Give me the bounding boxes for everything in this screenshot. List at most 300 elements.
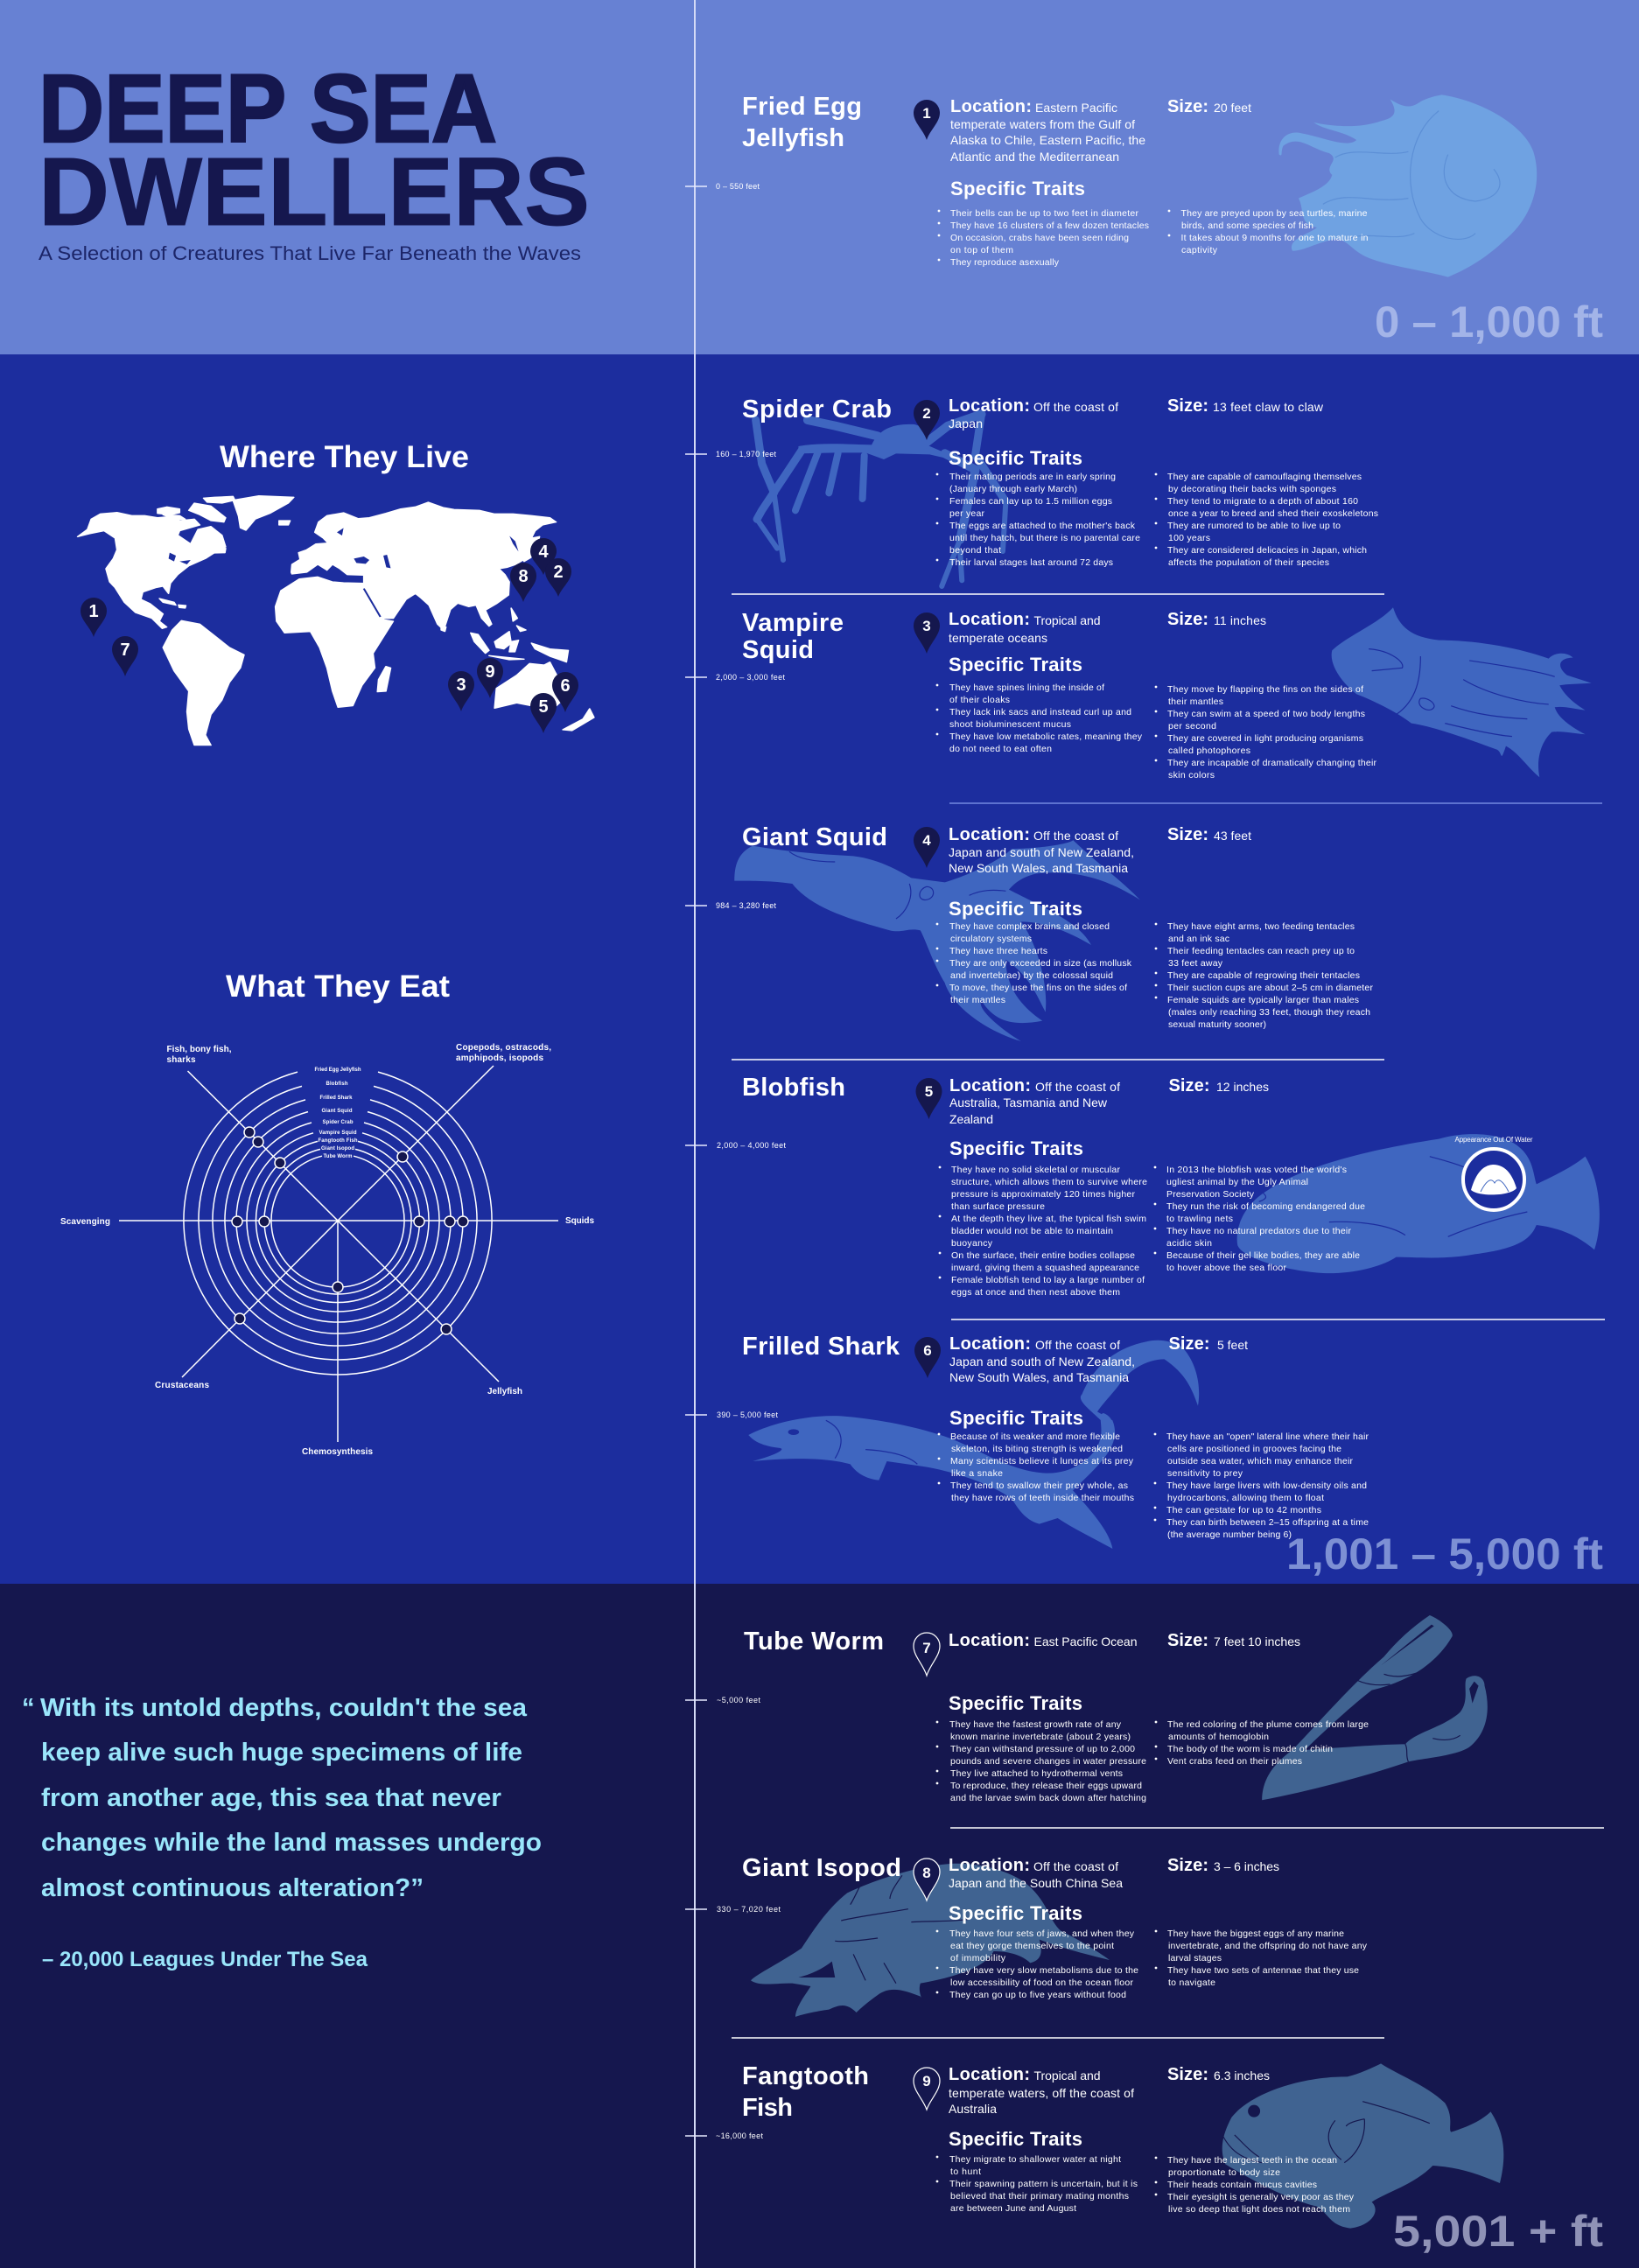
- radial diet chart: [60, 1043, 594, 1457]
- traits: right column: [1155, 684, 1377, 780]
- size: 6.3 inches: [1214, 2068, 1270, 2082]
- traits: right column: (males only reaching 33 feet, though they reach: [1168, 1007, 1370, 1018]
- traits: left column: They have no solid skeletal or muscular: [951, 1165, 1120, 1175]
- quote attribution: – 20,000 Leagues Under The Sea: [42, 1948, 368, 1971]
- quote: from another age, this sea that never: [41, 1784, 501, 1812]
- traits: left column: [936, 921, 1132, 1005]
- pin 6: 6: [923, 1342, 932, 1359]
- traits: right column: [1155, 2155, 1355, 2215]
- location: Tropical and: [1034, 613, 1101, 627]
- location: Japan and south of New Zealand,: [949, 1354, 1135, 1368]
- chart: category labels: [60, 1043, 594, 1457]
- traits: right column: [1154, 1432, 1369, 1540]
- band: 0 to 1,000 ft background: [0, 0, 1639, 354]
- depth marker: 390 – 5,000 feet: [717, 1410, 778, 1419]
- traits: right column: ugliest animal by the Ugly Animal: [1166, 1177, 1308, 1187]
- traits: left column: of their cloaks: [949, 695, 1010, 705]
- traits: right column: affects the population of their species: [1168, 557, 1329, 568]
- traits: left column: [936, 1928, 1138, 2000]
- traits: right column: hydrocarbons, allowing them to float: [1167, 1493, 1324, 1503]
- map pin 5: [530, 693, 557, 733]
- chart: ring labels: Tube Worm: [324, 1154, 352, 1159]
- depth marker: 0 – 550 feet: [716, 182, 760, 191]
- depth marker: [685, 1410, 778, 1419]
- species name: Giant Squid: [742, 823, 887, 851]
- pin 3: [914, 612, 940, 654]
- traits: right column: larval stages: [1168, 1953, 1222, 1964]
- traits: left column: [936, 2154, 1138, 2214]
- traits: right column: [1155, 921, 1374, 1030]
- size: Size:: [1167, 396, 1208, 416]
- size: [1167, 97, 1251, 116]
- traits: right column: Their suction cups are about 2–5 cm in diameter: [1167, 983, 1374, 993]
- traits: left column: They have very slow metabolisms due to the: [949, 1965, 1138, 1976]
- traits: left column: [936, 682, 1143, 754]
- size: [1167, 610, 1266, 629]
- traits: right column: outside sea water, which may enhance their: [1167, 1456, 1353, 1466]
- location: Location:: [949, 825, 1030, 844]
- location: Location:: [949, 1334, 1031, 1354]
- pin 8 outline: [914, 1858, 940, 1900]
- depth range label: 0 to 1,000 ft: 0 – 1,000 ft: [1375, 298, 1603, 346]
- pin 4: [914, 827, 940, 868]
- chart: data points: [232, 1127, 468, 1334]
- traits: right column: sensitivity to prey: [1167, 1468, 1243, 1479]
- traits: right column: called photophores: [1168, 746, 1250, 756]
- species name: Jellyfish: [742, 124, 844, 152]
- map pin 2: [545, 558, 571, 597]
- traits: left column: do not need to eat often: [949, 744, 1052, 754]
- chart: category labels: Scavenging: [60, 1217, 110, 1227]
- depth range label: 1,001 to 5,000 ft: 1,001 – 5,000 ft: [1286, 1530, 1603, 1578]
- heading: specific traits: Specific Traits: [949, 1902, 1082, 1924]
- traits: left column: pressure is approximately 120 times higher: [951, 1189, 1136, 1200]
- location: Location:: [950, 97, 1032, 116]
- heading: specific traits: Specific Traits: [949, 654, 1082, 676]
- inset: appearance out of water: Appearance Out Of Water: [1454, 1136, 1533, 1144]
- chart: spokes: [119, 1066, 558, 1442]
- panel: Spider Crab: [685, 396, 1378, 586]
- heading: specific traits: Specific Traits: [949, 898, 1082, 920]
- location: [949, 396, 1118, 430]
- title: DEEP SEA: [39, 55, 497, 163]
- size: Size:: [1167, 1856, 1208, 1875]
- heading: specific traits: Specific Traits: [949, 1407, 1083, 1429]
- traits: right column: It takes about 9 months for one to mature in: [1181, 233, 1369, 243]
- traits: left column: beyond that: [949, 545, 1001, 556]
- pin 5: [915, 1078, 942, 1119]
- map pin 9: [477, 658, 503, 698]
- depth marker: [685, 2132, 763, 2140]
- chart: ring labels: Fangtooth Fish: [319, 1138, 358, 1144]
- location: Location:: [949, 1856, 1030, 1875]
- traits: right column: captivity: [1181, 245, 1218, 256]
- traits: right column: They have the biggest eggs of any marine: [1167, 1928, 1344, 1939]
- pin 9 outline: [914, 2068, 940, 2110]
- pin 7 outline: [914, 1633, 940, 1676]
- traits: left column: [939, 1165, 1147, 1298]
- size: [1169, 1076, 1269, 1096]
- map pin 8: 8: [518, 567, 529, 586]
- depth marker: 160 – 1,970 feet: [716, 450, 776, 458]
- depth marker: [685, 673, 785, 682]
- location: Location:: [949, 2065, 1030, 2084]
- traits: left column: are between June and August: [950, 2203, 1076, 2214]
- traits: right column: acidic skin: [1166, 1238, 1212, 1249]
- traits: left column: They have 16 clusters of a few dozen tentacles: [950, 220, 1149, 231]
- panel: Frilled Shark: [685, 1333, 1369, 1549]
- traits: left column: They have three hearts: [949, 946, 1047, 956]
- chart: category labels: Jellyfish: [487, 1387, 522, 1396]
- traits: left column: buoyancy: [951, 1238, 993, 1249]
- species name: [742, 2062, 869, 2122]
- traits: right column: [1168, 208, 1369, 256]
- heading: what they eat: What They Eat: [226, 970, 450, 1004]
- size: [1167, 825, 1251, 844]
- chart: category labels: Squids: [565, 1216, 594, 1226]
- location: Eastern Pacific: [1035, 101, 1117, 115]
- silhouette: tube worm: [1262, 1615, 1488, 1800]
- pin 8 outline: 8: [922, 1865, 931, 1881]
- traits: right column: They have the largest teeth in the ocean: [1167, 2155, 1337, 2166]
- location: Off the coast of: [1033, 1859, 1118, 1873]
- chart: category labels: sharks: [166, 1055, 196, 1065]
- panel: Blobfish: [685, 1074, 1600, 1298]
- depth marker: [685, 1905, 781, 1914]
- size: Size:: [1169, 1334, 1209, 1354]
- traits: left column: low accessibility of food on the ocean floor: [950, 1978, 1134, 1988]
- map pin 7: [112, 636, 138, 676]
- map pin 8: [510, 563, 536, 602]
- depth marker: [685, 1141, 786, 1150]
- traits: right column: by decorating their backs with sponges: [1168, 484, 1336, 494]
- depth marker: ~5,000 feet: [717, 1696, 760, 1704]
- traits: left column: To move, they use the fins on the sides of: [949, 983, 1127, 993]
- traits: right column: 33 feet away: [1168, 958, 1223, 969]
- traits: left column: They tend to swallow their prey whole, as: [950, 1480, 1128, 1491]
- traits: left column: their mantles: [950, 995, 1005, 1005]
- traits: right column: Because of their gel like bodies, they are able: [1166, 1250, 1360, 1261]
- traits: right column: per second: [1168, 721, 1216, 732]
- traits: right column: They are incapable of dramatically changing their: [1167, 758, 1377, 768]
- panel: Vampire Squid: [685, 607, 1592, 780]
- species name: [742, 609, 844, 664]
- traits: right column: [1155, 1928, 1368, 1988]
- traits: left column: Many scientists believe it lunges at its prey: [950, 1456, 1134, 1466]
- traits: right column: They have large livers with low-density oils and: [1166, 1480, 1367, 1491]
- depth axis line: [694, 0, 696, 2268]
- silhouette: frilled shark: [748, 1340, 1199, 1549]
- pin 1: 1: [922, 105, 931, 122]
- traits: right column: once a year to breed and shed their exoskeletons: [1168, 508, 1378, 519]
- silhouette: blobfish: [1237, 1134, 1600, 1273]
- traits: left column: [938, 1432, 1134, 1503]
- map: continents: [78, 496, 594, 746]
- traits: left column: (January through early March): [949, 484, 1077, 494]
- location: [950, 97, 1145, 164]
- traits: left column: and the larvae swim back down after hatching: [950, 1793, 1146, 1803]
- location: Japan: [949, 416, 983, 430]
- traits: left column: To reproduce, they release their eggs upward: [950, 1781, 1142, 1791]
- traits: left column: to hunt: [950, 2166, 981, 2177]
- depth marker: 330 – 7,020 feet: [717, 1905, 781, 1914]
- chart: category labels: Copepods, ostracods,: [456, 1043, 551, 1053]
- species name: Tube Worm: [744, 1628, 884, 1656]
- traits: left column: They reproduce asexually: [950, 257, 1060, 268]
- traits: right column: Their eyesight is generally very poor as they: [1167, 2192, 1355, 2202]
- chart: ring labels: Frilled Shark: [320, 1096, 353, 1101]
- traits: right column: They have an "open" lateral line where their hair: [1166, 1432, 1369, 1442]
- chart: rings: [184, 1072, 492, 1375]
- traits: right column: 100 years: [1168, 533, 1210, 543]
- traits: right column: to navigate: [1168, 1978, 1215, 1988]
- map pin 5: 5: [538, 697, 549, 717]
- size: Size:: [1169, 1076, 1209, 1096]
- pin 2: 2: [922, 405, 931, 422]
- traits: left column: They have four sets of jaws, and when they: [949, 1928, 1135, 1939]
- traits: left column: Their bells can be up to two feet in diameter: [950, 208, 1139, 219]
- traits: right column: They tend to migrate to a depth of about 160: [1167, 496, 1358, 507]
- pin 9 outline: 9: [922, 2073, 931, 2090]
- traits: right column: The body of the worm is made of chitin: [1167, 1744, 1333, 1754]
- title: DWELLERS: [39, 138, 590, 246]
- silhouette: giant isopod: [751, 1864, 1110, 2017]
- silhouette: vampire squid: [1332, 607, 1592, 777]
- depth marker: 2,000 – 3,000 feet: [716, 673, 785, 682]
- location: [949, 825, 1134, 875]
- map pin 1: 1: [88, 602, 99, 621]
- world map with location pins: [78, 496, 594, 746]
- location: Australia, Tasmania and New: [949, 1096, 1108, 1110]
- traits: left column: until they hatch, but there is no parental care: [949, 533, 1140, 543]
- heading: specific traits: Specific Traits: [949, 1692, 1082, 1714]
- traits: left column: structure, which allows them to survive where: [951, 1177, 1147, 1187]
- size: 20 feet: [1214, 101, 1251, 115]
- pin 4: 4: [922, 832, 931, 849]
- chart: ring labels: Giant Isopod: [321, 1146, 354, 1152]
- chart: ring labels: Spider Crab: [322, 1120, 354, 1125]
- size: 7 feet 10 inches: [1214, 1634, 1300, 1648]
- location: [949, 2065, 1134, 2116]
- map pin 3: [448, 671, 474, 711]
- location: Off the coast of: [1033, 829, 1118, 843]
- traits: left column: They have low metabolic rates, meaning they: [949, 732, 1143, 742]
- species name: Frilled Shark: [742, 1333, 900, 1361]
- depth marker: 2,000 – 4,000 feet: [717, 1141, 786, 1150]
- panel: Fangtooth Fish: [685, 2062, 1503, 2229]
- traits: left column: than surface pressure: [951, 1201, 1045, 1212]
- traits: left column: Their mating periods are in early spring: [949, 472, 1116, 482]
- chart: ring labels: Giant Squid: [322, 1109, 353, 1114]
- location: Zealand: [949, 1112, 993, 1126]
- traits: right column: sexual maturity sooner): [1168, 1019, 1266, 1030]
- traits: right column: to hover above the sea floor: [1166, 1263, 1286, 1273]
- traits: left column: pounds and severe changes in water pressure: [950, 1756, 1146, 1767]
- species name: Fish: [742, 2094, 793, 2122]
- pin 6: [914, 1337, 941, 1378]
- traits: right column: They are preyed upon by sea turtles, marine: [1181, 208, 1368, 219]
- map pin 6: [552, 672, 578, 712]
- traits: left column: At the depth they live at, the typical fish swim: [951, 1214, 1146, 1224]
- chart: ring labels: Fried Egg Jellyfish: [315, 1068, 361, 1073]
- pin 5: 5: [925, 1083, 933, 1100]
- size: 5 feet: [1217, 1338, 1248, 1352]
- traits: right column: proportionate to body size: [1168, 2167, 1280, 2178]
- map pin 3: 3: [456, 676, 466, 695]
- map pin 4: [530, 538, 557, 575]
- traits: right column: They have no natural predators due to their: [1166, 1226, 1351, 1236]
- traits: right column: their mantles: [1168, 696, 1223, 707]
- chart: category labels: Crustaceans: [155, 1381, 209, 1390]
- traits: left column: They can go up to five years without food: [949, 1990, 1126, 2000]
- heading: specific traits: Specific Traits: [950, 178, 1085, 200]
- size: 13 feet claw to claw: [1213, 400, 1324, 414]
- traits: left column: they have rows of teeth inside their mouths: [951, 1493, 1134, 1503]
- size: [1167, 1856, 1279, 1875]
- chart: ring labels: [315, 1068, 361, 1159]
- depth marker: ~16,000 feet: [716, 2132, 763, 2140]
- traits: left column: bladder would not be able to maintain: [951, 1226, 1113, 1236]
- location: Off the coast of: [1035, 1338, 1120, 1352]
- silhouette: spider crab: [756, 414, 1005, 586]
- panel: Tube Worm: [685, 1615, 1488, 1803]
- traits: right column: They have two sets of antennae that they use: [1167, 1965, 1359, 1976]
- traits: left column: on top of them: [950, 245, 1013, 256]
- traits: left column: On the surface, their entire bodies collapse: [951, 1250, 1135, 1261]
- location: [949, 1856, 1123, 1890]
- traits: left column: like a snake: [951, 1468, 1003, 1479]
- size: [1167, 2065, 1270, 2084]
- pin 1: [914, 100, 940, 140]
- traits: left column: They can withstand pressure of up to 2,000: [950, 1744, 1135, 1754]
- quote: changes while the land masses undergo: [41, 1829, 542, 1857]
- traits: left column: Their spawning pattern is uncertain, but it is: [949, 2179, 1138, 2189]
- location: Australia: [949, 2102, 997, 2116]
- traits: left column: They have spines lining the inside of: [949, 682, 1104, 693]
- traits: left column: known marine invertebrate (about 2 years): [950, 1732, 1131, 1742]
- chart: category labels: Chemosynthesis: [302, 1447, 373, 1457]
- chart: category labels: Fish, bony fish,: [166, 1045, 232, 1054]
- location: Location:: [949, 1631, 1030, 1650]
- size: [1169, 1334, 1248, 1354]
- depth marker: [685, 182, 760, 191]
- traits: right column: They can birth between 2–15 offspring at a time: [1166, 1517, 1369, 1528]
- location: Location:: [949, 610, 1030, 629]
- location: Atlantic and the Mediterranean: [950, 150, 1119, 164]
- pin 7 outline: 7: [922, 1640, 931, 1656]
- quote: “: [22, 1694, 35, 1722]
- depth range label: 5,001+ ft: 5,001 + ft: [1393, 2207, 1603, 2256]
- species name: Vampire: [742, 609, 844, 637]
- traits: right column: They have eight arms, two feeding tentacles: [1167, 921, 1355, 932]
- traits: left column: circulatory systems: [950, 934, 1032, 944]
- band: 5,001+ ft background: [0, 1584, 1639, 2268]
- location: temperate waters, off the coast of: [949, 2086, 1134, 2100]
- traits: left column: inward, giving them a squashed appearance: [951, 1263, 1139, 1273]
- heading: where they live: Where They Live: [220, 440, 469, 474]
- heading: specific traits: Specific Traits: [949, 1138, 1083, 1159]
- map pin 6: 6: [560, 676, 571, 696]
- chart: ring labels: Blobfish: [326, 1082, 348, 1087]
- location: New South Wales, and Tasmania: [949, 861, 1128, 875]
- subtitle: A Selection of Creatures That Live Far Beneath the Waves: [39, 242, 581, 264]
- traits: right column: They run the risk of becoming endangered due: [1166, 1201, 1365, 1212]
- size: 43 feet: [1214, 829, 1251, 843]
- traits: right column: Their feeding tentacles can reach prey up to: [1167, 946, 1355, 956]
- silhouette: giant squid: [734, 840, 1140, 1041]
- traits: left column: and invertebrae) by the colossal squid: [950, 970, 1113, 981]
- size: Size:: [1167, 2065, 1208, 2084]
- traits: right column: [1154, 1165, 1365, 1273]
- location: temperate waters from the Gulf of: [950, 117, 1135, 131]
- pin 3: 3: [922, 618, 931, 634]
- panel: Giant Isopod: [685, 1854, 1368, 2017]
- quote: With its untold depths, couldn't the sea: [40, 1694, 528, 1722]
- traits: left column: [936, 472, 1140, 568]
- traits: left column: They have complex brains and closed: [949, 921, 1110, 932]
- quote: keep alive such huge specimens of life: [41, 1739, 522, 1767]
- location: Tropical and: [1034, 2068, 1101, 2082]
- traits: left column: of immobility: [950, 1953, 1006, 1964]
- size: [1167, 396, 1324, 416]
- inset: appearance out of water: [1454, 1136, 1533, 1210]
- heading: specific traits: Specific Traits: [949, 2128, 1082, 2150]
- traits: left column: They are only exceeded in size (as mollusk: [949, 958, 1132, 969]
- traits: right column: They move by flapping the fins on the sides of: [1167, 684, 1363, 695]
- species name: Fangtooth: [742, 2062, 869, 2090]
- traits: right column: Vent crabs feed on their plumes: [1167, 1756, 1302, 1767]
- size: [1167, 1631, 1300, 1650]
- traits: left column: Female blobfish tend to lay a large number of: [951, 1275, 1145, 1285]
- traits: right column: cells are positioned in grooves facing the: [1167, 1444, 1341, 1454]
- map pin 1: [81, 598, 107, 637]
- traits: left column: [938, 208, 1149, 268]
- traits: right column: They are rumored to be able to live up to: [1167, 521, 1341, 531]
- traits: left column: They live attached to hydrothermal vents: [950, 1768, 1123, 1779]
- size: 3 – 6 inches: [1214, 1859, 1279, 1873]
- traits: left column: believed that their primary mating months: [950, 2191, 1129, 2202]
- location: [949, 1334, 1135, 1384]
- species name: Fried Egg: [742, 93, 862, 121]
- traits: right column: In 2013 the blobfish was voted the world's: [1166, 1165, 1347, 1175]
- traits: left column: [936, 1719, 1146, 1803]
- traits: left column: They have the fastest growth rate of any: [949, 1719, 1122, 1730]
- traits: left column: The eggs are attached to the mother's back: [949, 521, 1136, 531]
- panel: Giant Squid: [685, 823, 1374, 1041]
- traits: right column: birds, and some species of fish: [1181, 220, 1313, 231]
- location: Location:: [949, 396, 1030, 416]
- location: Location:: [949, 1076, 1031, 1096]
- size: Size:: [1167, 97, 1208, 116]
- traits: right column: Preservation Society: [1166, 1189, 1255, 1200]
- traits: left column: shoot bioluminescent mucus: [949, 719, 1071, 730]
- silhouette: jellyfish: [1278, 94, 1537, 277]
- traits: left column: eggs at once and then nest above them: [951, 1287, 1120, 1298]
- panel: Fried Egg Jellyfish: [685, 93, 1537, 277]
- heading: specific traits: Specific Traits: [949, 447, 1082, 469]
- species name: Blobfish: [742, 1074, 845, 1102]
- location: Alaska to Chile, Eastern Pacific, the: [950, 133, 1145, 147]
- depth marker: 984 – 3,280 feet: [716, 901, 776, 910]
- traits: right column: They can swim at a speed of two body lengths: [1167, 709, 1365, 719]
- map pin 7: 7: [120, 640, 130, 660]
- depth marker: [685, 901, 776, 910]
- title: [39, 55, 590, 246]
- size: Size:: [1167, 610, 1208, 629]
- traits: left column: They migrate to shallower water at night: [949, 2154, 1121, 2165]
- traits: left column: skeleton, its biting strength is weakened: [951, 1444, 1123, 1454]
- traits: left column: eat they gorge themselves to the point: [950, 1941, 1114, 1951]
